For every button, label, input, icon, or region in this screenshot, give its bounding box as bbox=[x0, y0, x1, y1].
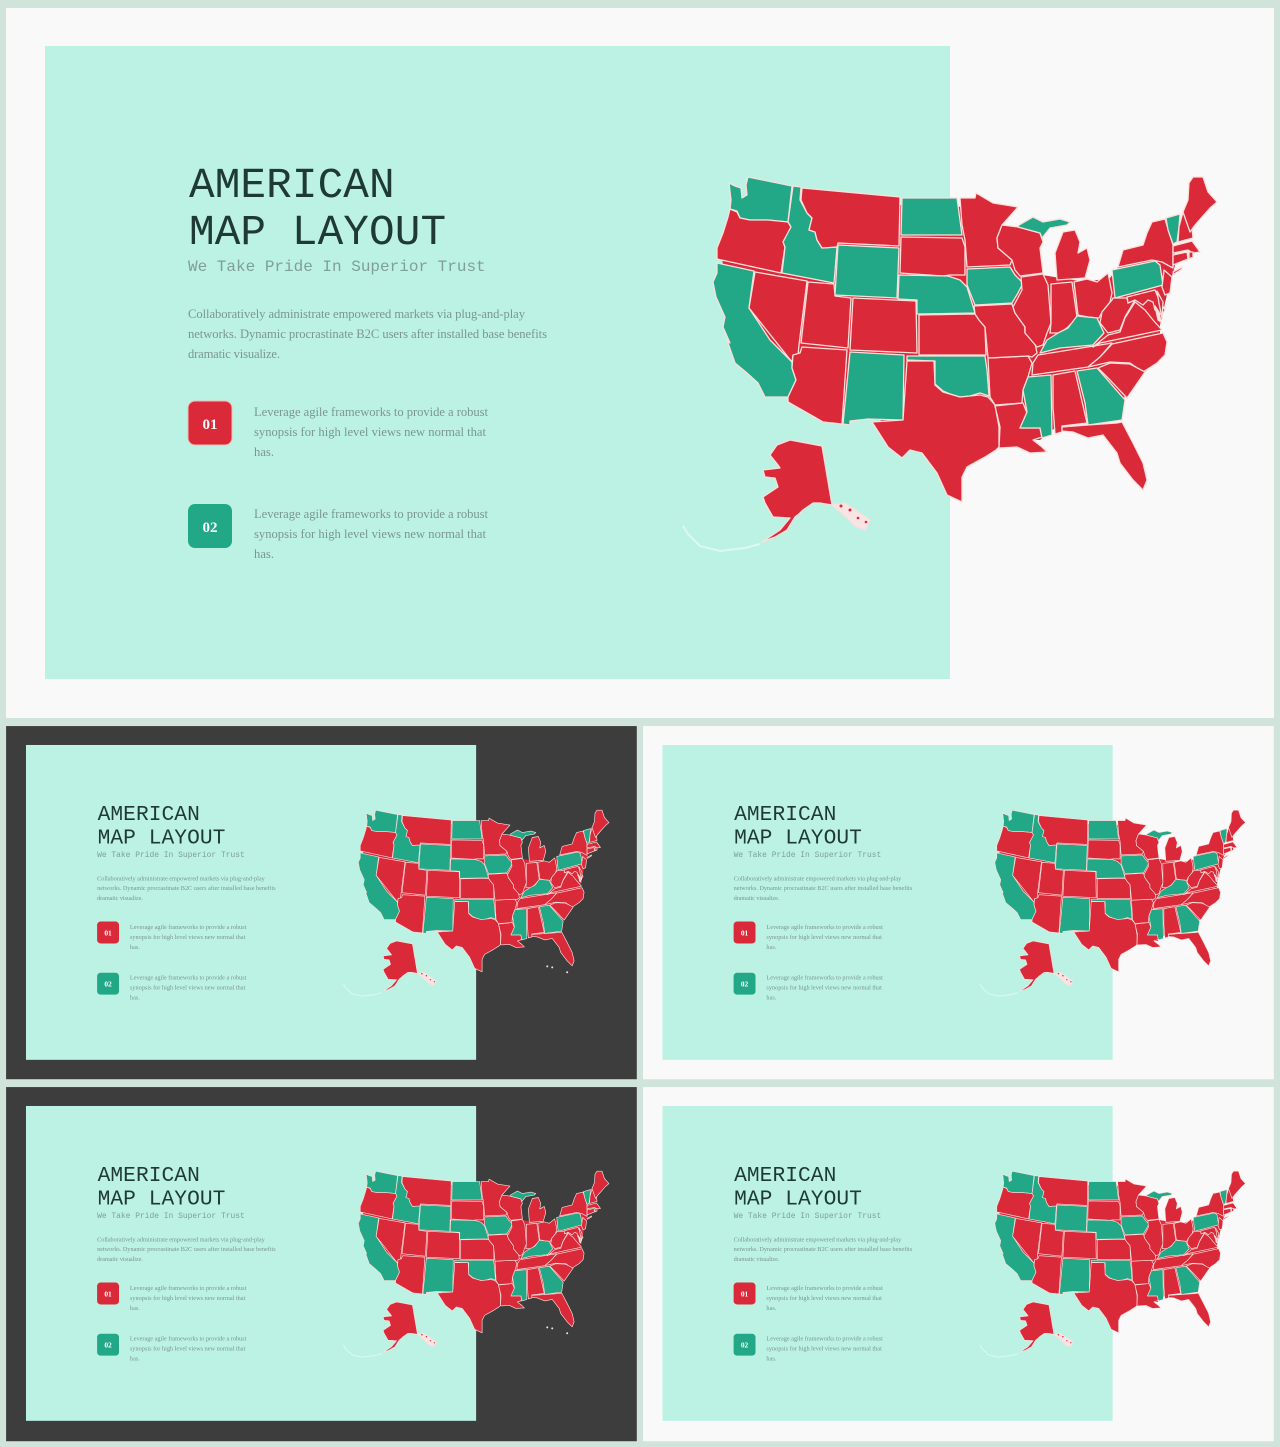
item 02 text: synopsis for high level views new normal that bbox=[766, 985, 882, 992]
item 01 text: has. bbox=[130, 944, 140, 951]
slide background bbox=[6, 726, 637, 1079]
mint card bbox=[26, 1106, 476, 1421]
body paragraph: networks. Dynamic procrastinate B2C users after installed base benefits bbox=[734, 885, 913, 892]
map of the United States bbox=[343, 1171, 609, 1357]
subtitle: We Take Pride In Superior Trust bbox=[734, 851, 881, 860]
item 02 text: has. bbox=[766, 995, 777, 1002]
item 02 text: Leverage agile frameworks to provide a robust bbox=[130, 975, 247, 982]
badge 02 bbox=[734, 973, 755, 995]
badge 02: 02 bbox=[104, 1341, 112, 1350]
mint card bbox=[45, 46, 950, 679]
map of the United States bbox=[980, 1171, 1245, 1357]
body paragraph: networks. Dynamic procrastinate B2C users after installed base benefits bbox=[97, 1246, 276, 1253]
slide background bbox=[6, 8, 1274, 718]
subtitle: We Take Pride In Superior Trust bbox=[97, 1212, 245, 1221]
title: AMERICAN bbox=[189, 161, 395, 210]
mint card bbox=[662, 745, 1113, 1060]
title bbox=[98, 1164, 225, 1211]
body paragraph: networks. Dynamic procrastinate B2C users after installed base benefits bbox=[188, 327, 547, 341]
body paragraph bbox=[734, 875, 913, 902]
item 02 text: Leverage agile frameworks to provide a robust bbox=[766, 1336, 883, 1343]
badge 01 bbox=[188, 401, 232, 445]
subtitle: We Take Pride In Superior Trust bbox=[188, 258, 486, 276]
badge 01 bbox=[97, 1283, 119, 1304]
body paragraph: dramatic visualize. bbox=[734, 1256, 780, 1263]
item 02 text: synopsis for high level views new normal that bbox=[766, 1346, 882, 1353]
item 02 text: Leverage agile frameworks to provide a robust bbox=[130, 1336, 247, 1343]
map of the United States bbox=[683, 177, 1217, 551]
body paragraph: dramatic visualize. bbox=[188, 347, 280, 361]
item 01 text: has. bbox=[254, 445, 274, 459]
body paragraph: Collaboratively administrate empowered markets via plug-and-play bbox=[734, 875, 902, 882]
body paragraph: Collaboratively administrate empowered markets via plug-and-play bbox=[734, 1236, 902, 1243]
slide background bbox=[6, 1087, 637, 1441]
item 02 text bbox=[766, 975, 883, 1002]
badge 02: 02 bbox=[104, 980, 112, 989]
panel: dark slide, bottom left bbox=[6, 1087, 637, 1441]
badge 01: 01 bbox=[741, 1289, 749, 1298]
title: MAP LAYOUT bbox=[98, 1187, 225, 1211]
body paragraph: dramatic visualize. bbox=[734, 895, 780, 902]
map islands bbox=[546, 1326, 568, 1334]
title: MAP LAYOUT bbox=[189, 208, 446, 257]
title: AMERICAN bbox=[734, 1164, 836, 1188]
slide background bbox=[643, 726, 1274, 1079]
item 01 text: synopsis for high level views new normal that bbox=[130, 934, 246, 941]
body paragraph bbox=[188, 307, 547, 361]
item 02 text: Leverage agile frameworks to provide a robust bbox=[766, 975, 883, 982]
item 02 text bbox=[130, 975, 247, 1002]
item 01 text: synopsis for high level views new normal that bbox=[766, 934, 882, 941]
body paragraph bbox=[97, 875, 276, 902]
badge 01: 01 bbox=[104, 928, 112, 937]
item 01 text: synopsis for high level views new normal that bbox=[766, 1295, 882, 1302]
title bbox=[189, 161, 446, 257]
item 01 text: Leverage agile frameworks to provide a robust bbox=[766, 1285, 883, 1292]
body paragraph: dramatic visualize. bbox=[97, 1256, 143, 1263]
body paragraph: dramatic visualize. bbox=[97, 895, 143, 902]
item 02 text: synopsis for high level views new normal that bbox=[130, 1346, 246, 1353]
item 02 text bbox=[130, 1336, 247, 1363]
title: AMERICAN bbox=[98, 1164, 200, 1188]
item 02 text: has. bbox=[130, 995, 140, 1002]
badge 02 bbox=[97, 973, 119, 995]
item 02 text bbox=[766, 1336, 883, 1363]
mint card bbox=[662, 1106, 1113, 1421]
item 01 text: has. bbox=[766, 944, 777, 951]
title: MAP LAYOUT bbox=[734, 826, 862, 850]
body paragraph: Collaboratively administrate empowered markets via plug-and-play bbox=[97, 1236, 266, 1243]
item 01 text: has. bbox=[130, 1305, 140, 1312]
body paragraph: networks. Dynamic procrastinate B2C users after installed base benefits bbox=[97, 885, 276, 892]
badge 02: 02 bbox=[741, 1341, 749, 1350]
item 01 text: Leverage agile frameworks to provide a robust bbox=[130, 1285, 247, 1292]
item 02 text bbox=[254, 507, 488, 561]
badge 01 bbox=[734, 922, 755, 943]
item 01 text: Leverage agile frameworks to provide a robust bbox=[254, 405, 488, 419]
item 02 text: has. bbox=[254, 547, 274, 561]
item 01 text: synopsis for high level views new normal that bbox=[254, 425, 486, 439]
title: AMERICAN bbox=[734, 803, 836, 827]
title bbox=[98, 803, 225, 850]
item 01 text: synopsis for high level views new normal that bbox=[130, 1295, 246, 1302]
badge 02: 02 bbox=[741, 980, 749, 989]
body paragraph: Collaboratively administrate empowered markets via plug-and-play bbox=[97, 875, 266, 882]
subtitle: We Take Pride In Superior Trust bbox=[97, 851, 245, 860]
item 01 text: Leverage agile frameworks to provide a robust bbox=[130, 924, 247, 931]
badge 02 bbox=[97, 1334, 119, 1356]
map of the United States bbox=[980, 810, 1245, 996]
map of the United States bbox=[343, 810, 609, 996]
panel: main slide bbox=[6, 8, 1274, 718]
badge 01 bbox=[734, 1283, 755, 1304]
badge 02 bbox=[188, 504, 232, 548]
title bbox=[734, 1164, 862, 1211]
title: AMERICAN bbox=[98, 803, 200, 827]
item 02 text: synopsis for high level views new normal that bbox=[254, 527, 486, 541]
badge 02: 02 bbox=[202, 520, 218, 536]
badge 01: 01 bbox=[741, 928, 749, 937]
item 01 text bbox=[766, 924, 883, 951]
slide background bbox=[643, 1087, 1274, 1441]
title: MAP LAYOUT bbox=[98, 826, 225, 850]
body paragraph bbox=[734, 1236, 913, 1263]
item 02 text: synopsis for high level views new normal that bbox=[130, 985, 246, 992]
mint card bbox=[26, 745, 476, 1060]
panel: dark slide, top left bbox=[6, 726, 637, 1079]
panel: light slide, top right bbox=[643, 726, 1274, 1079]
item 01 text bbox=[254, 405, 488, 459]
badge 01: 01 bbox=[104, 1289, 112, 1298]
badge 01 bbox=[97, 922, 119, 943]
item 02 text: Leverage agile frameworks to provide a robust bbox=[254, 507, 488, 521]
item 01 text bbox=[130, 1285, 247, 1312]
map islands bbox=[546, 965, 568, 973]
panel: light slide, bottom right bbox=[643, 1087, 1274, 1441]
title bbox=[734, 803, 862, 850]
item 01 text: Leverage agile frameworks to provide a robust bbox=[766, 924, 883, 931]
subtitle: We Take Pride In Superior Trust bbox=[734, 1212, 881, 1221]
item 01 text bbox=[130, 924, 247, 951]
item 02 text: has. bbox=[766, 1356, 777, 1363]
body paragraph bbox=[97, 1236, 276, 1263]
body paragraph: networks. Dynamic procrastinate B2C users after installed base benefits bbox=[734, 1246, 913, 1253]
item 01 text bbox=[766, 1285, 883, 1312]
title: MAP LAYOUT bbox=[734, 1187, 862, 1211]
item 02 text: has. bbox=[130, 1356, 140, 1363]
item 01 text: has. bbox=[766, 1305, 777, 1312]
badge 02 bbox=[734, 1334, 755, 1356]
badge 01: 01 bbox=[202, 417, 218, 433]
body paragraph: Collaboratively administrate empowered markets via plug-and-play bbox=[188, 307, 526, 321]
